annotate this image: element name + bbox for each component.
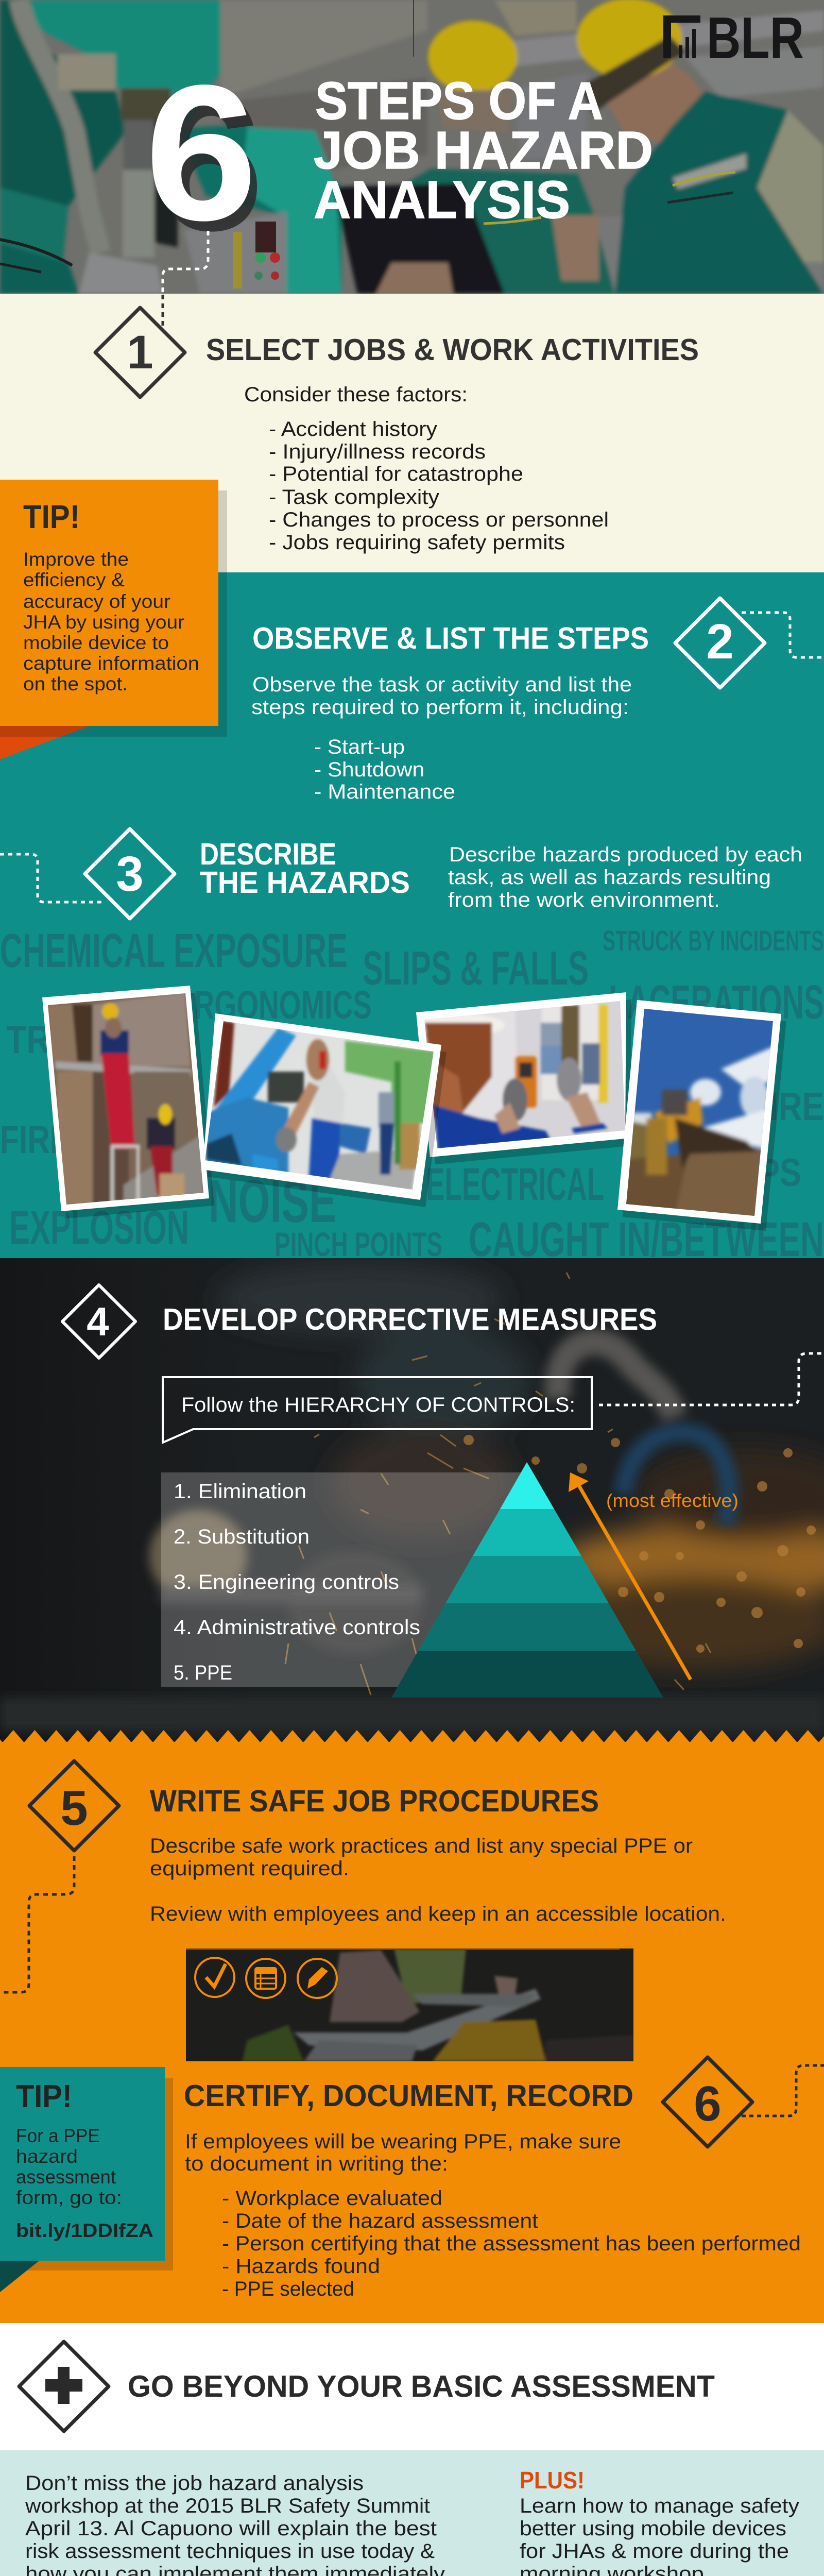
hazard word cloud: CHEMICAL EXPOSURE (0, 924, 348, 977)
tip box 1: Improve the (23, 549, 129, 570)
arrow: most effective: (most effective) (606, 1490, 739, 1511)
controls list panel: 4. Administrative controls (174, 1616, 420, 1639)
body text: - PPE selected (222, 2278, 354, 2300)
body text: Review with employees and keep in an accessible location. (150, 1903, 726, 1925)
logo: BLR (dark): BLR (707, 6, 804, 71)
heading: WRITE SAFE JOB PROCEDURES (150, 1784, 599, 1818)
diamond badge 4 (62, 1285, 135, 1358)
heading: SELECT JOBS & WORK ACTIVITIES (206, 333, 699, 367)
connector: into step 3 (0, 854, 105, 902)
body text: - Shutdown (314, 758, 424, 781)
photo collage (42, 986, 786, 1231)
icon: pencil (298, 1959, 337, 1998)
tip box 2: hazard (16, 2146, 78, 2167)
workshop text: workshop at the 2015 BLR Safety Summit (25, 2495, 430, 2517)
diamond badge 2: 2 (706, 614, 734, 669)
body text: Describe safe work practices and list any special PPE or (150, 1835, 693, 1857)
plus text: better using mobile devices (520, 2517, 786, 2540)
title (314, 71, 653, 229)
tip box 1: TIP! (23, 498, 80, 535)
hazard word cloud: ERGONOMICS (175, 983, 372, 1027)
factors list: - Accident history (269, 418, 437, 440)
hazard word cloud: ELECTRICAL (426, 1158, 604, 1210)
body text: task, as well as hazards resulting (448, 866, 771, 889)
connector: step 5 to step 6 (0, 1856, 74, 1992)
photo: warehouse workers on ladder (42, 986, 214, 1218)
factors list: - Potential for catastrophe (269, 463, 523, 485)
tip box 1: capture information (23, 653, 199, 674)
plus text: for JHAs & more during the (520, 2540, 789, 2563)
hazard word cloud: SLIPS & FALLS (363, 941, 589, 995)
factors list: - Injury/illness records (269, 440, 486, 463)
pyramid chart (391, 1462, 663, 1698)
panel: steps 5 and 6 orange (0, 1730, 824, 2323)
controls list panel: 5. PPE (174, 1662, 232, 1684)
diamond badge 1: 1 (127, 326, 153, 379)
plus text: PLUS! (520, 2467, 585, 2494)
panel: teal steps 2 and 3 (0, 480, 824, 1267)
panel: go beyond heading (0, 2323, 824, 2450)
callout: hierarchy of controls (163, 1377, 592, 1443)
big number 6: 6 (145, 45, 258, 261)
factors list: Consider these factors: (244, 383, 468, 406)
body text: steps required to perform it, including: (251, 696, 629, 719)
heading: CERTIFY, DOCUMENT, RECORD (184, 2079, 633, 2113)
background photo: grinder sparks (0, 1258, 824, 1742)
tip box 2: TIP! (16, 2079, 72, 2114)
connector: step 4 to step 5 (599, 1353, 824, 1405)
step 5 (0, 1761, 726, 2061)
tip box 1 (0, 480, 227, 759)
tip box 1: mobile device to (23, 632, 169, 653)
zigzag edge (0, 1730, 824, 1742)
tip box 1: accuracy of your (23, 591, 170, 612)
step 2 (251, 598, 824, 803)
workshop text (25, 2472, 450, 2576)
hazard word cloud: PINCH POINTS (274, 1225, 442, 1263)
title: JOB HAZARD (314, 121, 653, 180)
body text: equipment required. (150, 1857, 349, 1880)
tip box 1: JHA by using your (23, 612, 184, 633)
factors list: - Task complexity (269, 486, 439, 509)
diamond badge 3 (85, 829, 175, 919)
diamond badge 5: 5 (60, 1781, 88, 1836)
hazard word cloud: EXPLOSION (9, 1201, 189, 1254)
factors list (244, 383, 609, 554)
tip box 2: For a PPE (16, 2125, 100, 2146)
workshop text: April 13. Al Capuono will explain the best (25, 2517, 437, 2540)
body text (251, 673, 632, 803)
connector: hero to step 1 (163, 231, 208, 330)
diamond badge 3: 3 (116, 846, 144, 902)
panel: hero (0, 0, 824, 294)
hazard word cloud: TRIPS (706, 1151, 801, 1195)
photo: hand on tablet with icons (186, 1948, 633, 2061)
big number 6: 6 (153, 56, 264, 271)
tip box 1: efficiency & (23, 569, 125, 590)
controls list panel: 1. Elimination (174, 1480, 306, 1503)
controls list panel (161, 1472, 526, 1687)
logo: BLR (dark) (663, 6, 804, 71)
heading (200, 837, 410, 900)
connector: step 2 to step 3 (742, 613, 824, 657)
hazard word cloud (0, 924, 824, 1267)
hazard word cloud: FIRE (0, 1118, 71, 1162)
photo: electrician with multimeter (412, 992, 631, 1164)
step 6 (184, 2057, 824, 2300)
photo: factory worker at machine (202, 1013, 447, 1207)
diamond badge 1 (95, 308, 185, 397)
tip box 2: form, go to: (16, 2187, 122, 2208)
body text: Observe the task or activity and list the (252, 673, 632, 696)
body text: If employees will be wearing PPE, make sure (185, 2130, 621, 2153)
connector: step 6 to plus (742, 2065, 824, 2116)
panel: step 4 dark (0, 1258, 824, 1742)
step 3 (0, 829, 802, 919)
title: STEPS OF A (315, 71, 603, 130)
workshop text: Don’t miss the job hazard analysis (25, 2472, 364, 2495)
body text: - Date of the hazard assessment (222, 2210, 538, 2232)
tip box 2: assessment (16, 2166, 116, 2188)
workshop text: risk assessment techniques in use today & (25, 2540, 435, 2563)
body text (185, 2130, 801, 2300)
tip box 2 (0, 2067, 173, 2292)
icon: checkmark (195, 1958, 234, 1997)
diamond badge plus (19, 2342, 109, 2431)
body text: - Hazards found (222, 2255, 380, 2278)
body text: Describe hazards produced by each (449, 843, 802, 866)
panel: workshop promo (0, 2450, 824, 2576)
panel: step 1 background (0, 294, 824, 572)
heading: DEVELOP CORRECTIVE MEASURES (163, 1302, 657, 1336)
body text: - Start-up (314, 736, 405, 758)
factors list: - Jobs requiring safety permits (269, 531, 565, 554)
heading: OBSERVE & LIST THE STEPS (252, 621, 649, 655)
controls list panel: 2. Substitution (174, 1526, 310, 1548)
diamond badge 4: 4 (87, 1299, 109, 1344)
title: ANALYSIS (314, 170, 570, 229)
body text (150, 1835, 726, 1925)
plus text: Learn how to manage safety (520, 2495, 799, 2517)
body text: from the work environment. (448, 889, 720, 911)
tip box 1: on the spot. (23, 673, 128, 694)
plus text (520, 2467, 799, 2576)
diamond badge 6: 6 (694, 2076, 722, 2131)
body text: to document in writing the: (185, 2153, 448, 2175)
arrow: most effective (569, 1472, 739, 1680)
hero photo: workers with laptop beside teal machine (0, 0, 824, 294)
heading: DESCRIBE (200, 837, 336, 871)
body text: - Workplace evaluated (222, 2187, 442, 2210)
factors list: - Changes to process or personnel (269, 509, 609, 531)
diamond badge 6 (663, 2057, 752, 2147)
diamond badge 5 (29, 1761, 119, 1851)
heading: GO BEYOND YOUR BASIC ASSESSMENT (128, 2369, 715, 2403)
body text: - Maintenance (314, 781, 455, 803)
tip box 2: bit.ly/1DDIfZA (16, 2220, 153, 2241)
body text (448, 843, 802, 911)
callout: hierarchy of controls: Follow the HIERARCHY OF CONTROLS: (181, 1394, 575, 1416)
hazard word cloud: NOISE (209, 1167, 336, 1235)
controls list panel: 3. Engineering controls (174, 1571, 399, 1594)
icon: table (246, 1959, 285, 1998)
body text: - Person certifying that the assessment has been performed (222, 2232, 801, 2255)
panel: step 1 (95, 308, 699, 554)
hazard word cloud: TRIPS (6, 1018, 104, 1062)
photo: bulldozer under blue sky (617, 1000, 786, 1231)
diamond badge 2 (675, 598, 765, 688)
heading: THE HAZARDS (200, 866, 410, 900)
